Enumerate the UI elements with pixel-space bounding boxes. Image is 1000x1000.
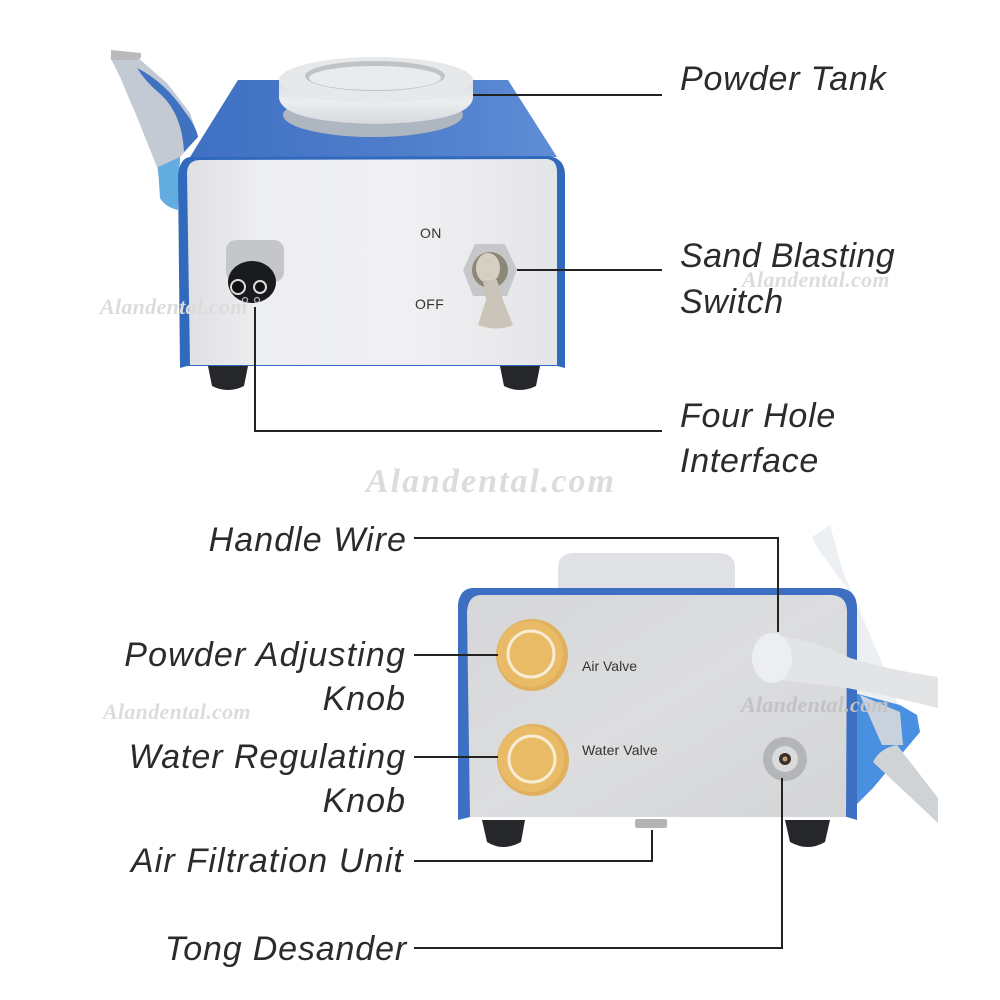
watermark text: [98, 267, 890, 724]
blue housing top: [190, 80, 557, 157]
hose from grommet: [752, 633, 938, 823]
handpiece and clip: [812, 525, 920, 808]
powder tank: [279, 57, 473, 137]
four hole connector: [226, 240, 284, 303]
dial on top: [558, 553, 735, 590]
water knob: [497, 724, 569, 796]
front blue flange: [178, 156, 565, 368]
watermark text: Alandental.com: [101, 699, 251, 724]
watermark text: Alandental.com: [364, 463, 616, 500]
valve labels: Air Valve: [582, 658, 637, 674]
feet: [482, 820, 525, 847]
device: top view, front of machine: [110, 50, 565, 390]
label: Tong Desander: Tong Desander: [165, 930, 408, 968]
leader lines: [255, 95, 782, 948]
watermark text: Alandental.com: [739, 692, 889, 717]
air filtration port: [635, 819, 667, 828]
toggle switch: [463, 244, 517, 328]
label: Four Hole Interface: Four Hole: [680, 397, 836, 435]
watermark text: Alandental.com: [740, 267, 890, 292]
label: Powder Adjusting Knob: Knob: [323, 680, 406, 718]
label: Handle Wire: Handle Wire: [209, 521, 407, 559]
label: Sand Blasting Switch: Switch: [680, 283, 784, 321]
label: Air Filtration Unit: Air Filtration Unit: [129, 842, 404, 880]
device: top view, front of machine: OFF: [415, 296, 444, 312]
label: Powder Tank: Powder Tank: [680, 60, 888, 98]
front silver plate: [187, 159, 557, 365]
label: Water Regulating Knob: Knob: [323, 782, 406, 820]
silver plate: [467, 595, 847, 817]
switch labels: ON: [420, 225, 442, 241]
label: Water Regulating Knob: Water Regulating: [129, 738, 406, 776]
watermark text: Alandental.com: [98, 294, 248, 319]
label: Sand Blasting Switch: Sand Blasting: [680, 237, 895, 275]
feet: [208, 366, 248, 390]
device: bottom view, back of machine: Water Valve: [582, 742, 658, 758]
label: Four Hole Interface: Interface: [680, 442, 819, 480]
tong desander connector: [763, 737, 807, 781]
label: Powder Adjusting Knob: Powder Adjusting: [124, 636, 406, 674]
device: bottom view, back of machine: [458, 525, 938, 847]
powder knob: [496, 619, 568, 691]
blue housing: [458, 588, 857, 820]
handpiece behind the top device: [110, 50, 198, 210]
